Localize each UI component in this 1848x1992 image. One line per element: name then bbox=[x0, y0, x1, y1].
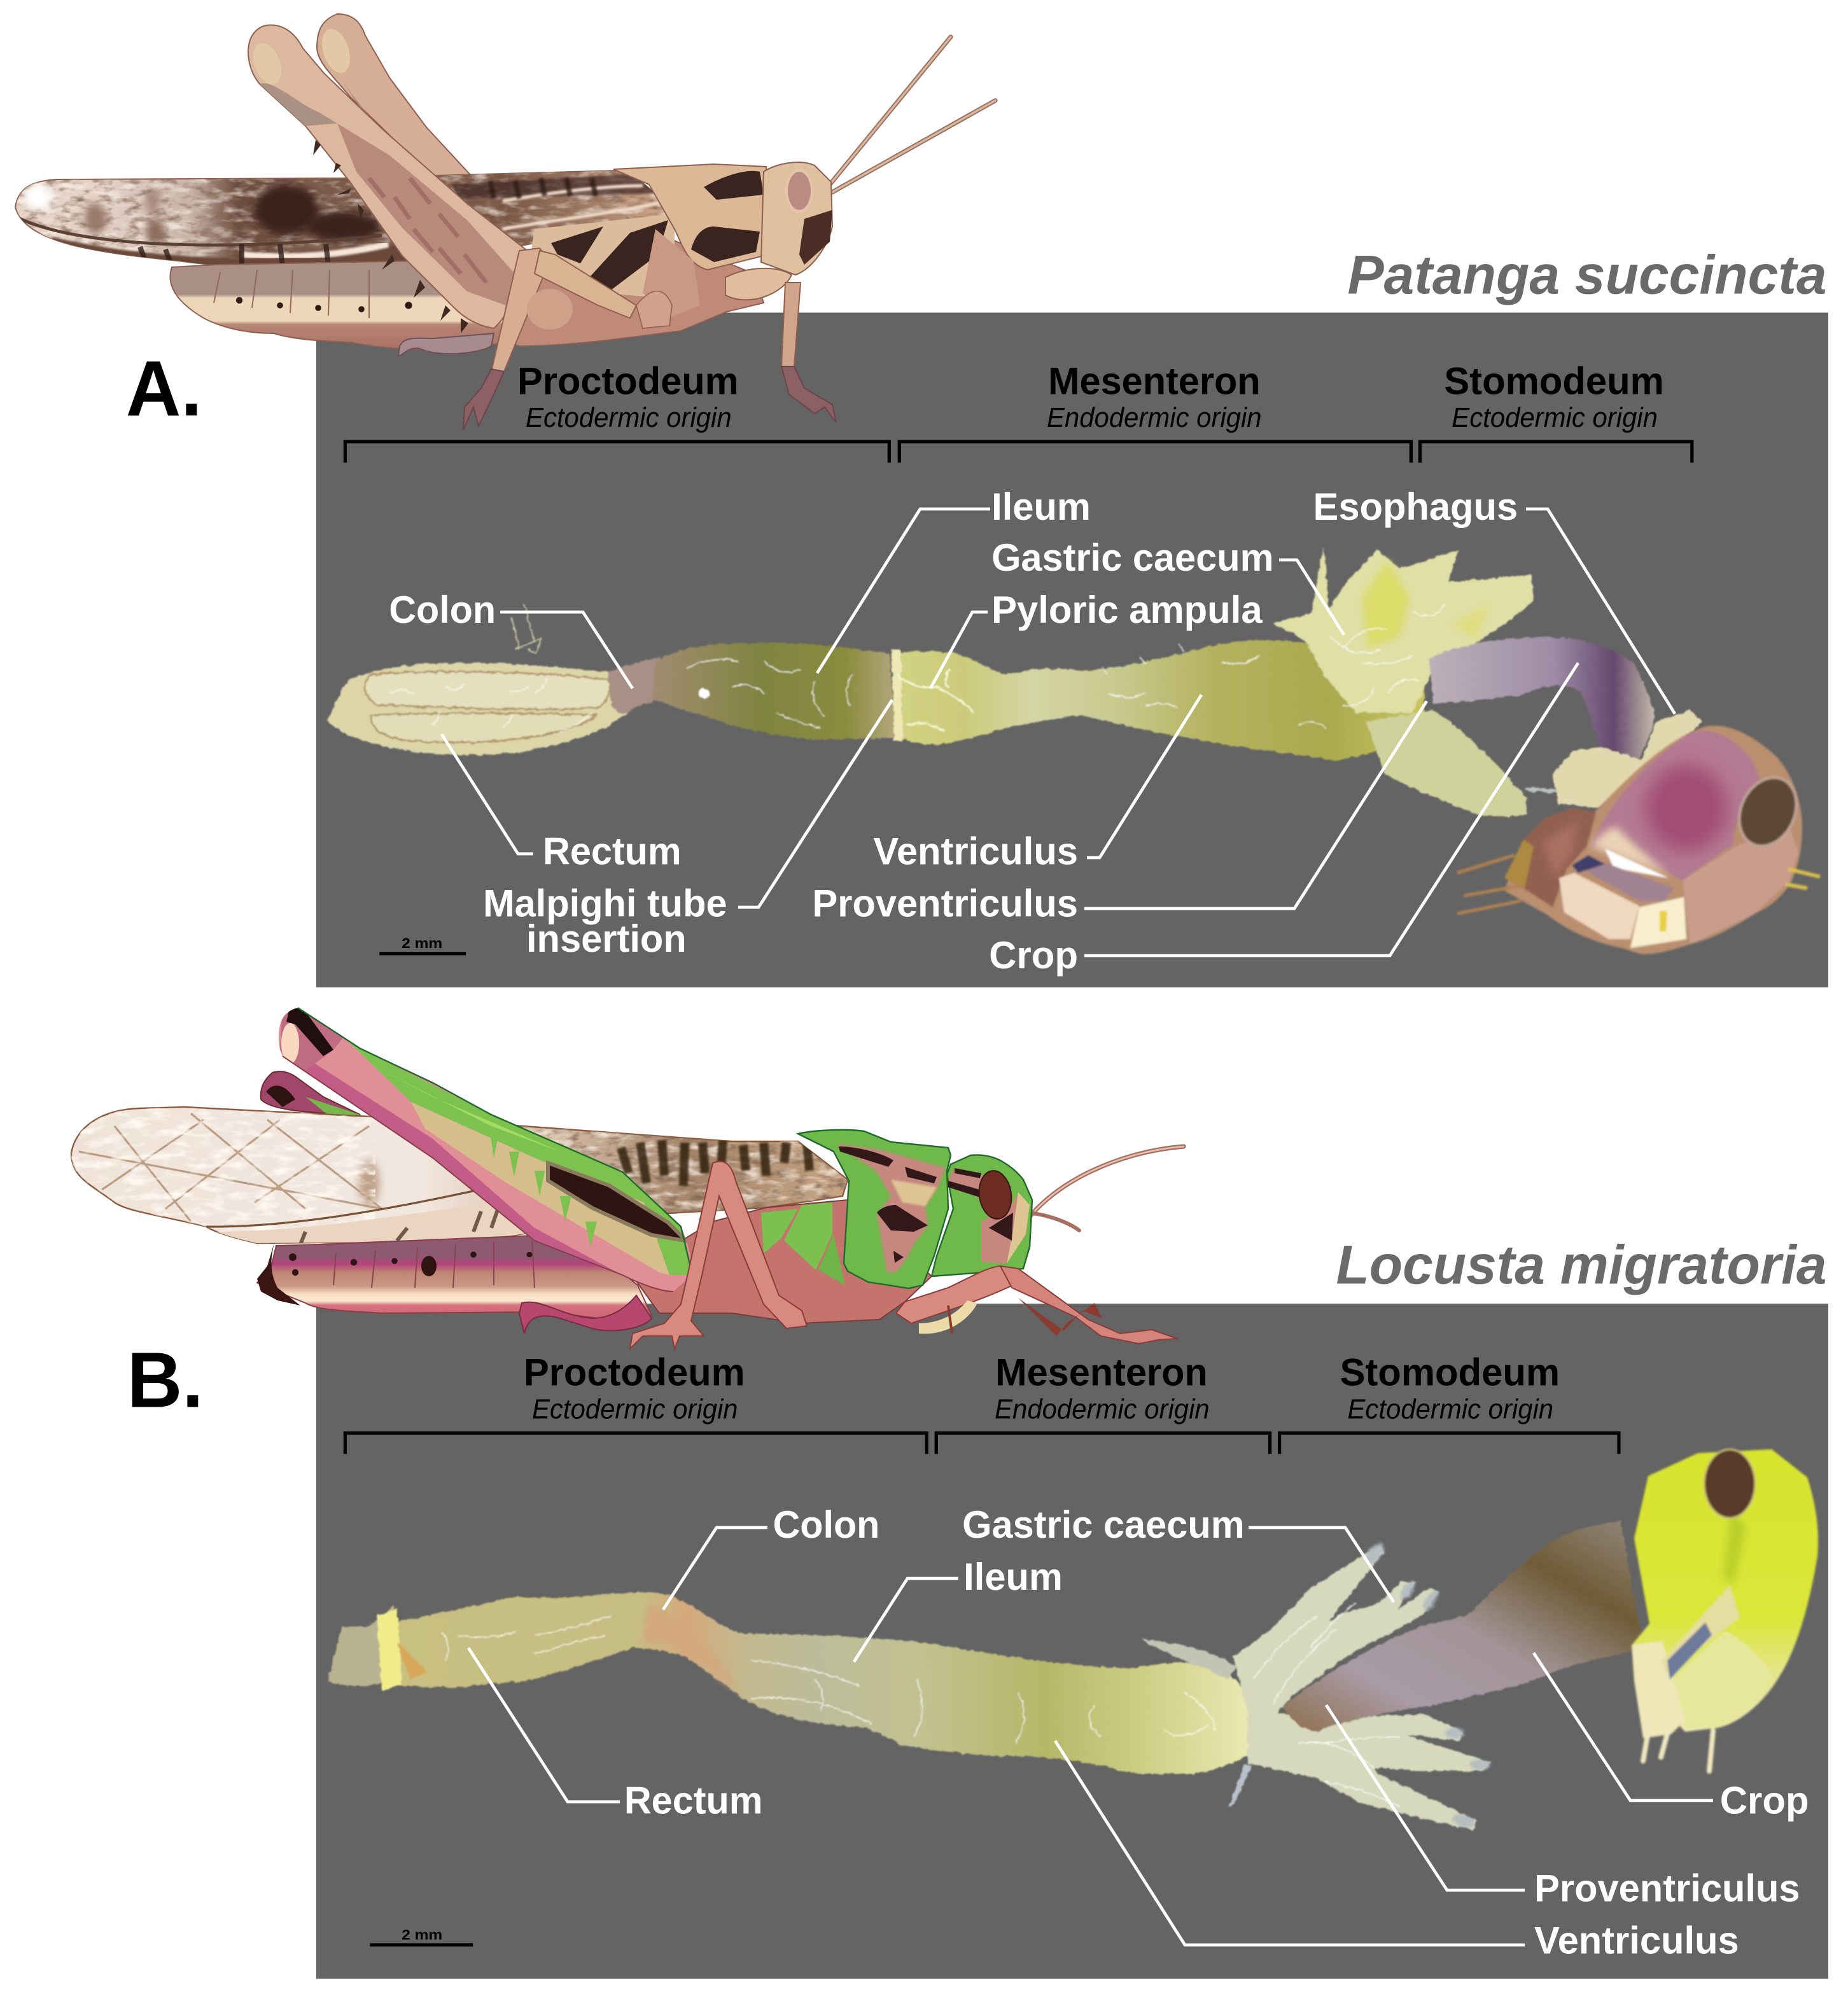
photo: Locusta migratoria dissected gut bbox=[327, 1521, 1642, 1830]
gut A: ileum bbox=[652, 643, 895, 740]
label: Gastric caecum A: Gastric caecum bbox=[991, 536, 1274, 579]
species title: Locusta migratoria: Locusta migratoria bbox=[1336, 1235, 1827, 1296]
scale bar B bbox=[370, 1926, 473, 1947]
label: Esophagus: Esophagus bbox=[1313, 485, 1518, 528]
illustration: Locusta migratoria grasshopper bbox=[70, 999, 1184, 1349]
section header: Mesenteron A: Mesenteron bbox=[1048, 359, 1261, 402]
gut A: crop bbox=[1429, 637, 1655, 763]
section sublabel: Ectodermic origin B stomodeum: Ectodermic origin bbox=[1347, 1393, 1553, 1424]
label: Crop A: Crop bbox=[989, 934, 1078, 977]
leader lines B bbox=[468, 1528, 1713, 1945]
gut A: gastric caecum upper bbox=[1273, 547, 1534, 713]
panel: Patanga succincta background bbox=[316, 312, 1828, 987]
panel letter B: B. bbox=[127, 1336, 204, 1424]
label: Gastric caecum B: Gastric caecum bbox=[962, 1503, 1245, 1546]
section header: Proctodeum A: Proctodeum bbox=[517, 359, 739, 402]
gut A: colon bbox=[608, 657, 661, 714]
label: Colon A: Colon bbox=[389, 589, 496, 631]
gut B: rectum tip bbox=[327, 1606, 395, 1686]
panel letter A: A. bbox=[126, 345, 202, 433]
section header: Stomodeum A: Stomodeum bbox=[1444, 359, 1664, 402]
label: Proventriculus B: Proventriculus bbox=[1534, 1867, 1800, 1909]
gut B: gastric caeca fingers bbox=[1142, 1540, 1490, 1830]
label: Rectum B: Rectum bbox=[624, 1780, 763, 1822]
scale bar B: 2 mm bbox=[402, 1926, 442, 1942]
section sublabel: Ectodermic origin B: Ectodermic origin bbox=[532, 1393, 738, 1424]
label: Colon B: Colon bbox=[773, 1503, 879, 1546]
gut A: rectum bbox=[327, 604, 636, 755]
scale bar A: 2 mm bbox=[402, 935, 442, 951]
label: Ileum B: Ileum bbox=[963, 1556, 1063, 1598]
photo: head of Patanga succincta bbox=[1457, 726, 1820, 954]
species title: Patanga succincta: Patanga succincta bbox=[1347, 244, 1827, 305]
label: Ventriculus B: Ventriculus bbox=[1534, 1919, 1739, 1961]
gut A: pyloric ampulla and ventriculus bbox=[895, 640, 1424, 761]
label: Proventriculus A: Proventriculus bbox=[812, 882, 1078, 924]
section sublabel: Ectodermic origin A: Ectodermic origin bbox=[526, 402, 732, 433]
gut A: trachea stub bbox=[1526, 789, 1558, 791]
label: Rectum A: Rectum bbox=[543, 830, 682, 872]
brackets A bbox=[345, 442, 1692, 463]
section sublabel: Ectodermic origin A stomodeum: Ectodermic origin bbox=[1452, 402, 1658, 433]
brackets B bbox=[345, 1433, 1619, 1454]
label: Pyloric ampula: Pyloric ampula bbox=[991, 589, 1263, 631]
section header: Stomodeum B: Stomodeum bbox=[1340, 1351, 1560, 1393]
label: Crop B: Crop bbox=[1720, 1780, 1809, 1822]
leader lines A bbox=[442, 509, 1675, 956]
photo: Patanga succincta dissected gut bbox=[327, 547, 1702, 816]
label: Ileum A: Ileum bbox=[991, 485, 1091, 528]
gut A: gastric caecum lower bbox=[1366, 710, 1527, 816]
illustration: Patanga succincta grasshopper bbox=[13, 14, 995, 430]
gut B: hindgut to midgut tube bbox=[377, 1592, 1254, 1774]
gut B: crop bbox=[1283, 1521, 1642, 1732]
scale bar A bbox=[379, 935, 466, 955]
label: Ventriculus A: Ventriculus bbox=[873, 830, 1078, 872]
photo: head of Locusta migratoria bbox=[1632, 1449, 1818, 1771]
label: Malpighi tube insertion: insertion bbox=[526, 917, 687, 960]
section sublabel: Endodermic origin B: Endodermic origin bbox=[995, 1393, 1210, 1424]
label: Malpighi tube insertion bbox=[483, 882, 727, 960]
label: Malpighi tube insertion: Malpighi tube bbox=[483, 882, 727, 924]
section header: Proctodeum B: Proctodeum bbox=[524, 1351, 745, 1393]
section header: Mesenteron B: Mesenteron bbox=[995, 1351, 1208, 1393]
section sublabel: Endodermic origin A: Endodermic origin bbox=[1047, 402, 1262, 433]
panel: Locusta migratoria background bbox=[316, 1304, 1828, 1979]
gut A: tissue fringe bbox=[1553, 710, 1702, 808]
